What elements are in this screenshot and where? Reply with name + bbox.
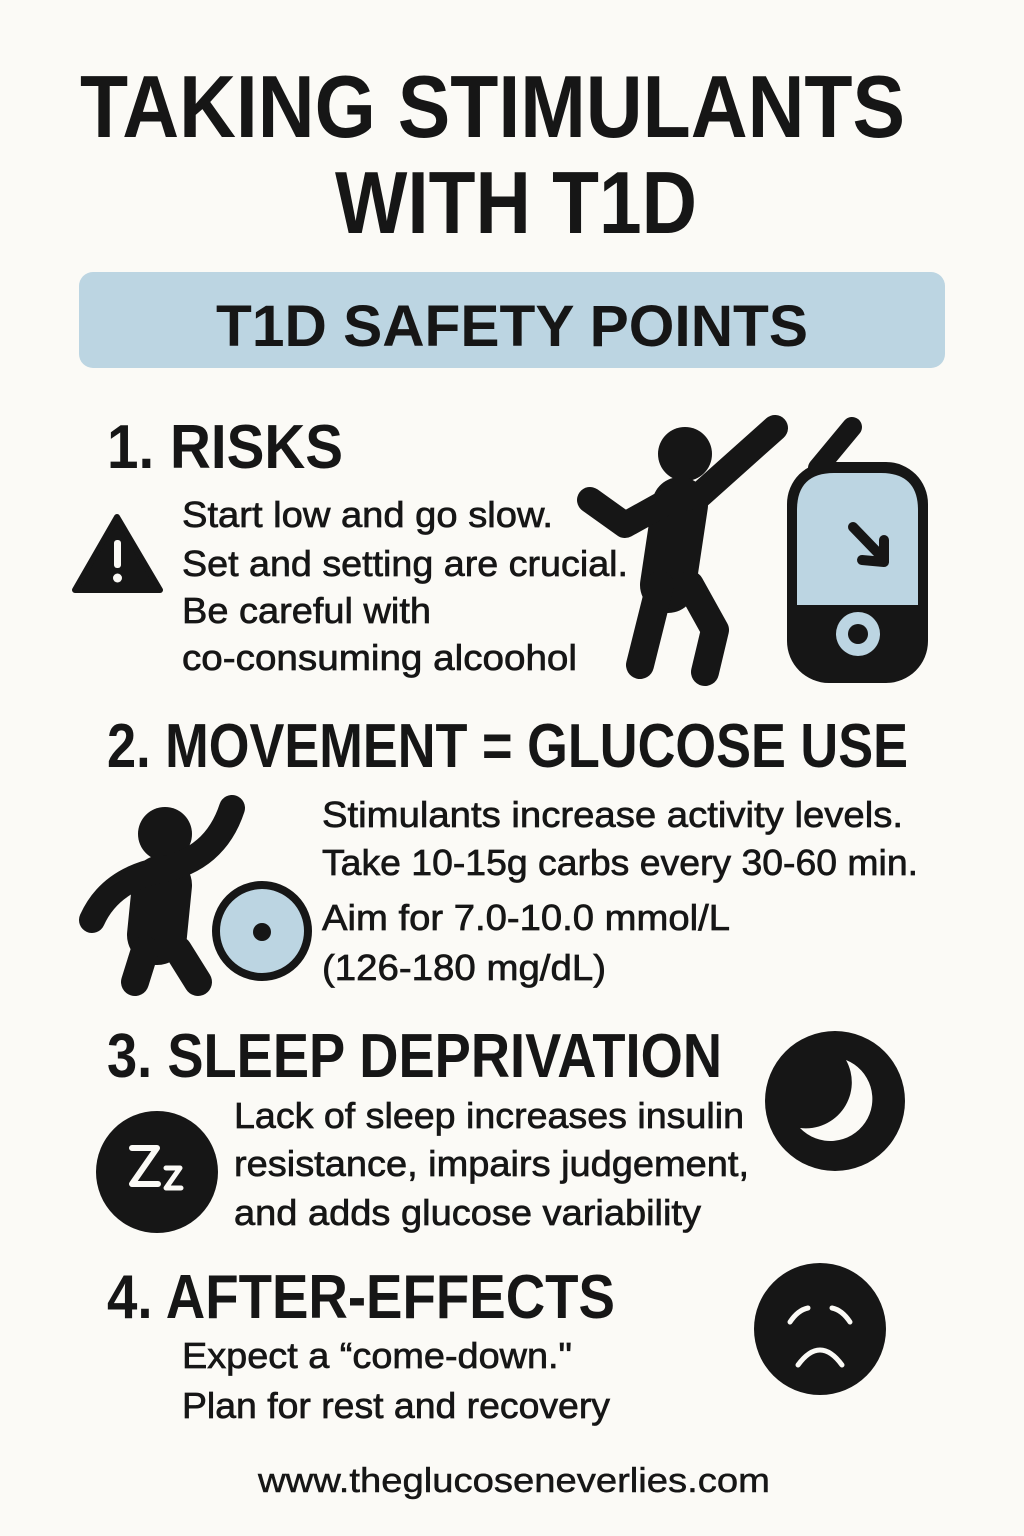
- text block: sleep: and adds glucose variability: [234, 1192, 701, 1233]
- icon: waving person: [92, 807, 232, 982]
- text block: movement: Take 10-15g carbs every 30-60 min.: [322, 842, 918, 883]
- title: [80, 57, 905, 252]
- text block: movement: (126-180 mg/dL): [322, 947, 606, 988]
- icon: warning triangle: [75, 517, 160, 590]
- text block: after-effects: Expect a “come-down.": [182, 1335, 572, 1376]
- text block: after-effects: [182, 1335, 610, 1426]
- text block: risks: co-consuming alcoohol: [182, 637, 577, 678]
- text block: risks: [182, 494, 628, 678]
- text block: sleep: Lack of sleep increases insulin: [234, 1095, 744, 1136]
- text block: risks: Be careful with: [182, 590, 431, 631]
- text block: after-effects: Plan for rest and recovery: [182, 1385, 610, 1426]
- banner: T1D safety points: T1D SAFETY POINTS: [216, 294, 808, 359]
- text block: movement: Aim for 7.0-10.0 mmol/L: [322, 897, 730, 938]
- icon: glucose disc: [216, 885, 308, 977]
- text block: movement: Stimulants increase activity levels.: [322, 794, 903, 835]
- section 4 heading: after-effects: 4. AFTER-EFFECTS: [107, 1263, 615, 1332]
- icon: Zz: [96, 1111, 218, 1233]
- text block: movement: [322, 794, 918, 988]
- icon: sad face: [754, 1263, 886, 1395]
- title: TAKING STIMULANTS: [80, 57, 905, 156]
- section 1 heading: risks: 1. RISKS: [107, 413, 343, 482]
- title: WITH T1D: [335, 153, 697, 252]
- section 3 heading: sleep deprivation: 3. SLEEP DEPRIVATION: [107, 1022, 722, 1091]
- text block: sleep: resistance, impairs judgement,: [234, 1143, 749, 1184]
- icon: moon: [765, 1031, 905, 1171]
- banner: T1D safety points: [79, 272, 945, 368]
- icon: dancing person: [590, 427, 775, 672]
- text block: sleep: [234, 1095, 749, 1233]
- text block: risks: Set and setting are crucial.: [182, 543, 628, 584]
- footer url: www.theglucoseneverlies.com: [257, 1462, 770, 1500]
- icon: glucose meter: [787, 427, 928, 683]
- text block: risks: Start low and go slow.: [182, 494, 553, 535]
